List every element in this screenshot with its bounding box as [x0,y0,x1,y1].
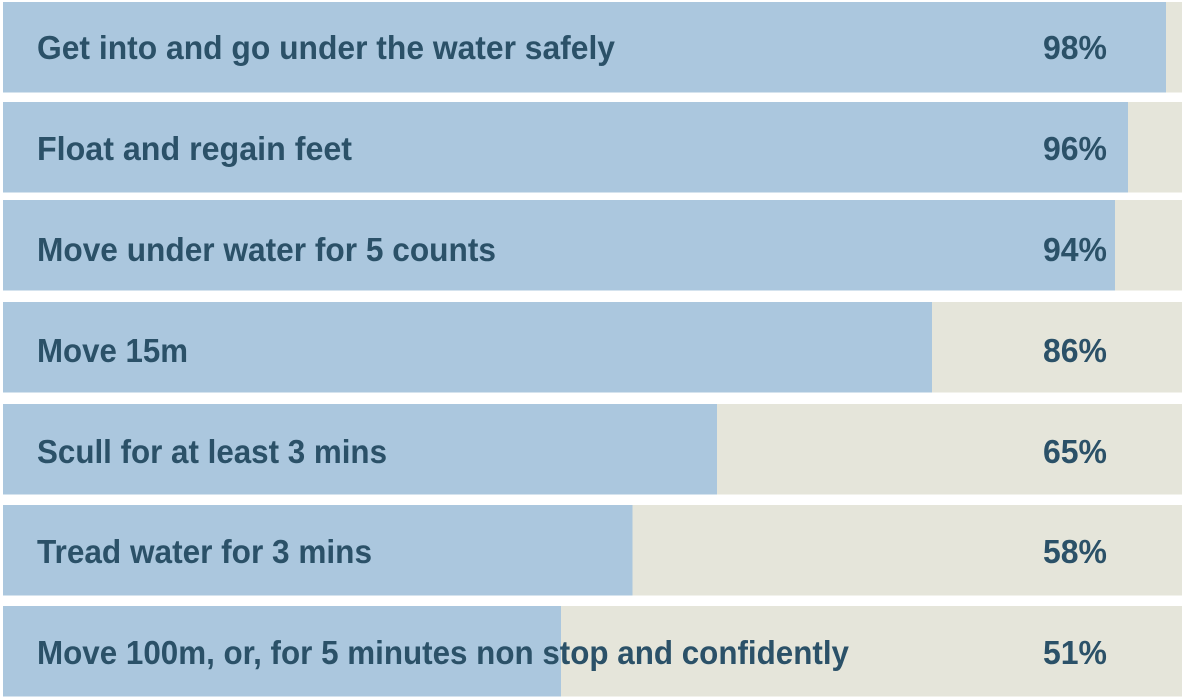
row: Move 15m 86%: 86% [1043,332,1107,369]
row: Tread water for 3 mins 58% [3,505,1182,596]
row: Scull for at least 3 mins 65%: 65% [1043,433,1107,470]
row: Scull for at least 3 mins 65% [3,404,1182,494]
row: Move 100m, or, for 5 minutes non stop and confidently 51%: 51% [1043,634,1107,671]
row: Get into and go under the water safely 98%: 98% [1043,29,1107,66]
row: Float and regain feet 96%: 96% [1043,130,1107,167]
row: Get into and go under the water safely 98%: Get into and go under the water safely [37,29,616,66]
row: Get into and go under the water safely 98% [3,2,1182,92]
row: Float and regain feet 96% [3,102,1182,192]
row: Move under water for 5 counts 94% [3,200,1182,290]
row: Float and regain feet 96%: Float and regain feet [37,130,352,167]
row: Tread water for 3 mins 58%: Tread water for 3 mins [37,533,372,570]
row: Move 15m 86%: Move 15m [37,332,188,369]
row: Move 15m 86% [3,302,1182,392]
row: Tread water for 3 mins 58%: 58% [1043,533,1107,570]
row: Move 100m, or, for 5 minutes non stop and confidently 51%: Move 100m, or, for 5 minutes non stop and confidently [37,634,850,671]
row: Move 100m, or, for 5 minutes non stop and confidently 51% [3,606,1182,696]
row: Move under water for 5 counts 94%: Move under water for 5 counts [37,231,496,268]
row: Scull for at least 3 mins 65%: Scull for at least 3 mins [37,433,387,470]
row: Move under water for 5 counts 94%: 94% [1043,231,1107,268]
